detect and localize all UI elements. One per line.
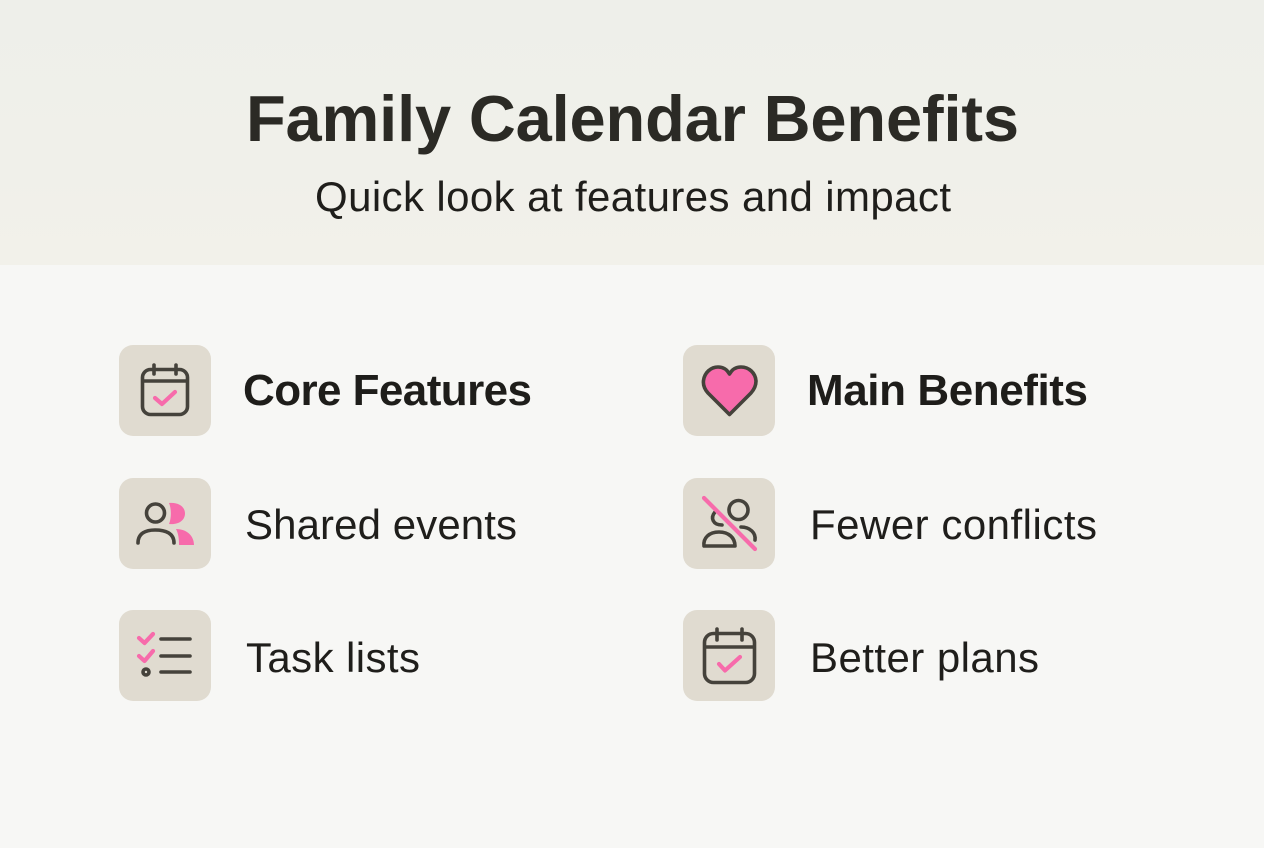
label: fewer conflicts: Fewer conflicts (810, 501, 1097, 548)
label: shared events: Shared events (245, 501, 517, 548)
label: task lists: Task lists (246, 634, 420, 681)
panel: core features column (119, 345, 532, 701)
main benefits heading row (683, 345, 1088, 436)
icon: two people (119, 478, 211, 569)
better plans row (683, 610, 1039, 701)
icon: people with slash (683, 478, 775, 569)
subtitle: Quick look at features and impact (315, 173, 951, 220)
panel: main benefits column (683, 345, 1097, 701)
heading: core features: Core Features (243, 366, 532, 415)
fewer conflicts row (683, 478, 1097, 569)
title: Family Calendar Benefits (246, 82, 1019, 155)
icon: calendar with check (119, 345, 211, 436)
heading: main benefits: Main Benefits (807, 366, 1088, 415)
label: better plans: Better plans (810, 634, 1039, 681)
shared events row (119, 478, 517, 569)
icon: heart (683, 345, 775, 436)
icon: calendar with check (683, 610, 775, 701)
icon: checklist (119, 610, 211, 701)
task lists row (119, 610, 420, 701)
core features heading row (119, 345, 532, 436)
